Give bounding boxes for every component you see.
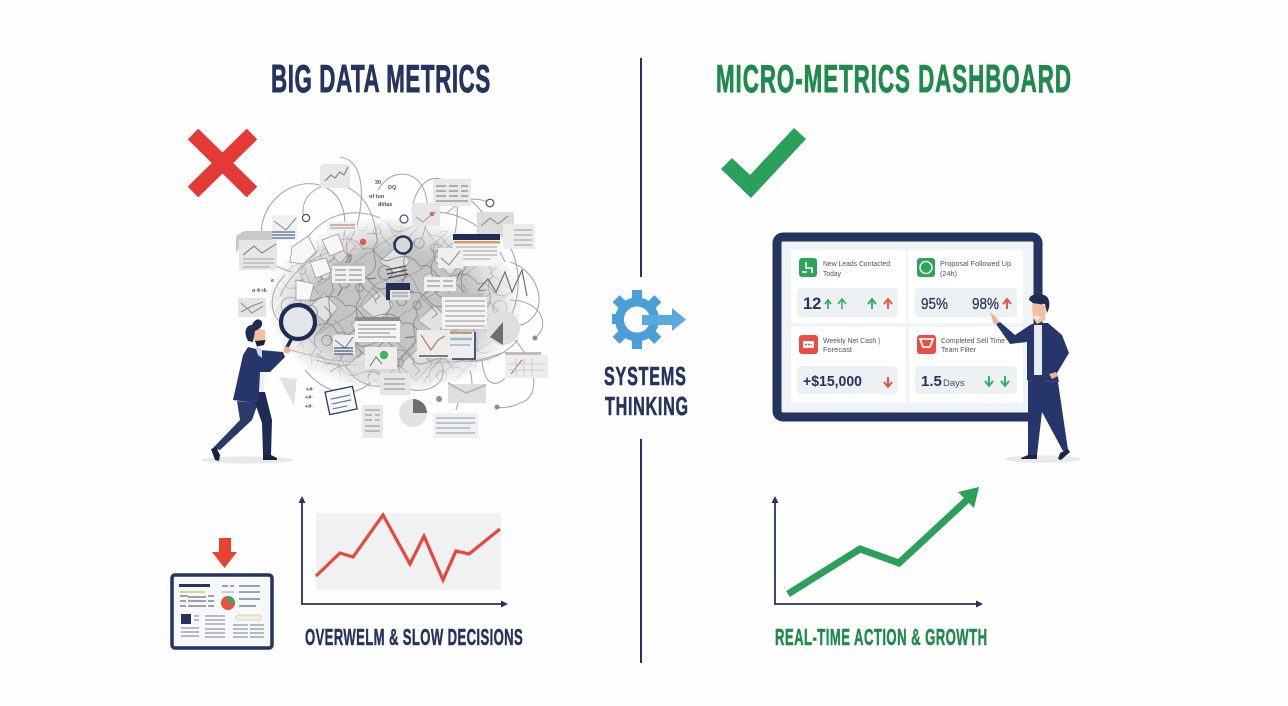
card: green dot xyxy=(365,347,397,369)
metric card: new leads xyxy=(791,250,906,323)
back leg xyxy=(255,392,272,455)
icon: systems thinking gear xyxy=(612,290,686,349)
metric card: sales cycle time: Days xyxy=(943,378,965,389)
card: lower bar table xyxy=(380,373,410,395)
metric card: new leads: Today xyxy=(823,269,841,278)
label: systems thinking xyxy=(604,361,688,421)
icon: green check xyxy=(721,128,806,198)
tone: central tangle shading xyxy=(274,222,516,388)
trousers xyxy=(1028,380,1068,455)
hair xyxy=(245,319,262,342)
metric card: sales cycle time: 1.5 xyxy=(921,373,942,390)
small labels: numeric fragments: +#· xyxy=(305,404,313,410)
plot background xyxy=(316,513,501,590)
gear ring xyxy=(620,302,654,337)
card: red line chart xyxy=(417,330,450,358)
card: mid right chart xyxy=(438,248,463,268)
metric card: sales cycle time: Completed Sell Time xyxy=(941,336,1005,345)
axis arrowheads xyxy=(298,496,508,608)
arrow xyxy=(642,308,686,331)
chart: right pie xyxy=(486,311,520,345)
label: systems thinking: SYSTEMS xyxy=(604,361,686,391)
heading: micro-metrics dashboard: MICRO-METRICS DASHBOARD xyxy=(716,58,1071,101)
card: left line chart xyxy=(236,231,277,270)
scribble: right peaks xyxy=(478,270,527,296)
metric card: new leads: 12 xyxy=(803,295,821,313)
card: tilted outlined note xyxy=(325,386,357,415)
scribble: fine texture xyxy=(267,217,523,393)
metric card: weekly net cash xyxy=(791,327,906,403)
metric card: sales cycle time: Team Filter xyxy=(941,345,976,354)
card: navy report xyxy=(386,283,410,300)
card: small table xyxy=(424,277,456,291)
small labels: numeric fragments xyxy=(252,180,397,410)
metric card: weekly net cash: Weekly Net Cash | xyxy=(823,336,880,345)
chart: volatile red line xyxy=(298,496,508,608)
face xyxy=(254,328,266,346)
illustration: analyst with magnifying glass xyxy=(201,305,315,464)
card: chart with red dot xyxy=(412,203,440,226)
card: bars with navy axis xyxy=(448,332,476,359)
small labels: numeric fragments: DQ xyxy=(388,185,397,191)
card: lower central table xyxy=(355,317,400,342)
shoes xyxy=(1021,449,1070,460)
card: lower grey envelope xyxy=(448,382,486,403)
small labels: numeric fragments: 30 xyxy=(375,180,381,186)
hand on hip xyxy=(1049,372,1058,379)
shirt neck xyxy=(255,346,262,358)
panel: micro-metrics dashboard screen xyxy=(777,237,1038,417)
loops: outer curves xyxy=(261,157,543,410)
metric card: new leads: New Leads Contacted xyxy=(823,259,890,268)
data line xyxy=(316,515,500,580)
small labels: numeric fragments: +#· xyxy=(305,395,313,401)
card: top right grid xyxy=(477,212,514,234)
white gap behind figure xyxy=(1028,412,1064,422)
arrowhead xyxy=(958,487,979,508)
card: bottom document xyxy=(362,405,383,438)
caption: overwelm and slow decisions: OVERWELM & SLOW DECISIONS xyxy=(305,624,523,650)
caption: real-time action and growth: REAL-TIME ACTION & GROWTH xyxy=(775,624,987,650)
divider: lower xyxy=(640,439,642,663)
data line xyxy=(788,499,968,594)
metric card: weekly net cash: +$15,000 xyxy=(803,373,862,390)
smile xyxy=(1033,316,1041,320)
small labels: numeric fragments: o·¢·ılı xyxy=(252,288,267,294)
jacket xyxy=(996,322,1069,382)
shoes xyxy=(211,447,277,461)
illustration: presenter pointing at dashboard xyxy=(990,294,1081,463)
metric card: proposals followed up: 95% xyxy=(921,296,948,313)
icon: red down arrow xyxy=(212,538,237,568)
metric card: proposals followed up xyxy=(908,250,1023,323)
illustration: tangled data network xyxy=(236,157,548,438)
metric card: proposals followed up: (24h) xyxy=(940,269,957,278)
scribble: cell texture xyxy=(267,217,523,393)
card: upper strip xyxy=(327,222,357,231)
metric card: weekly net cash: Forecast xyxy=(823,345,853,354)
shape: grey cone xyxy=(279,377,297,406)
axes xyxy=(302,500,503,604)
small labels: numeric fragments: di/tas xyxy=(378,202,392,208)
label: systems thinking: THINKING xyxy=(605,391,688,421)
shirt strip xyxy=(259,372,265,392)
scribble: white cells at left xyxy=(290,234,344,300)
small labels: numeric fragments: +#· xyxy=(306,387,314,393)
axes xyxy=(775,500,978,604)
small labels: numeric fragments: e xyxy=(271,278,274,284)
heading: big data metrics: BIG DATA METRICS xyxy=(271,58,490,101)
shadow xyxy=(201,456,293,464)
icon: red cross xyxy=(193,134,252,192)
card: central table xyxy=(332,263,365,283)
axis arrowheads xyxy=(772,496,983,608)
metric card: sales cycle time xyxy=(909,327,1023,403)
pointing hand xyxy=(990,312,999,324)
face xyxy=(1032,303,1046,324)
card: far right chart xyxy=(505,352,548,378)
markers: dots and rings xyxy=(302,199,538,410)
card: blue striped xyxy=(272,215,297,240)
shadow xyxy=(1005,455,1081,463)
shirt xyxy=(1034,325,1042,375)
card: far right list xyxy=(503,224,535,249)
metric card: proposals followed up: 98% xyxy=(972,296,999,313)
icon: cluttered tablet report xyxy=(172,575,272,648)
card: small navy striped xyxy=(333,335,355,355)
card: bottom list xyxy=(433,413,478,438)
card: top right table xyxy=(433,179,471,206)
chart: bottom pie xyxy=(399,399,427,427)
small labels: numeric fragments: of tun xyxy=(369,194,385,200)
magnifying glass xyxy=(281,305,315,349)
beard xyxy=(255,340,266,346)
chart: green growth line xyxy=(772,487,983,608)
metric card: proposals followed up: Proposal Followed Up xyxy=(940,259,1011,268)
screen frame xyxy=(777,237,1038,417)
card: right table xyxy=(442,293,487,329)
card: dark header report xyxy=(453,233,500,266)
card: striped stack xyxy=(386,266,408,278)
hand xyxy=(284,347,290,353)
hair xyxy=(1029,294,1049,313)
gear teeth xyxy=(612,290,661,349)
card: top sparkline xyxy=(320,164,350,188)
card: left small chart xyxy=(238,298,266,317)
jacket xyxy=(233,347,285,403)
front leg xyxy=(213,401,258,450)
divider: upper xyxy=(640,58,642,277)
